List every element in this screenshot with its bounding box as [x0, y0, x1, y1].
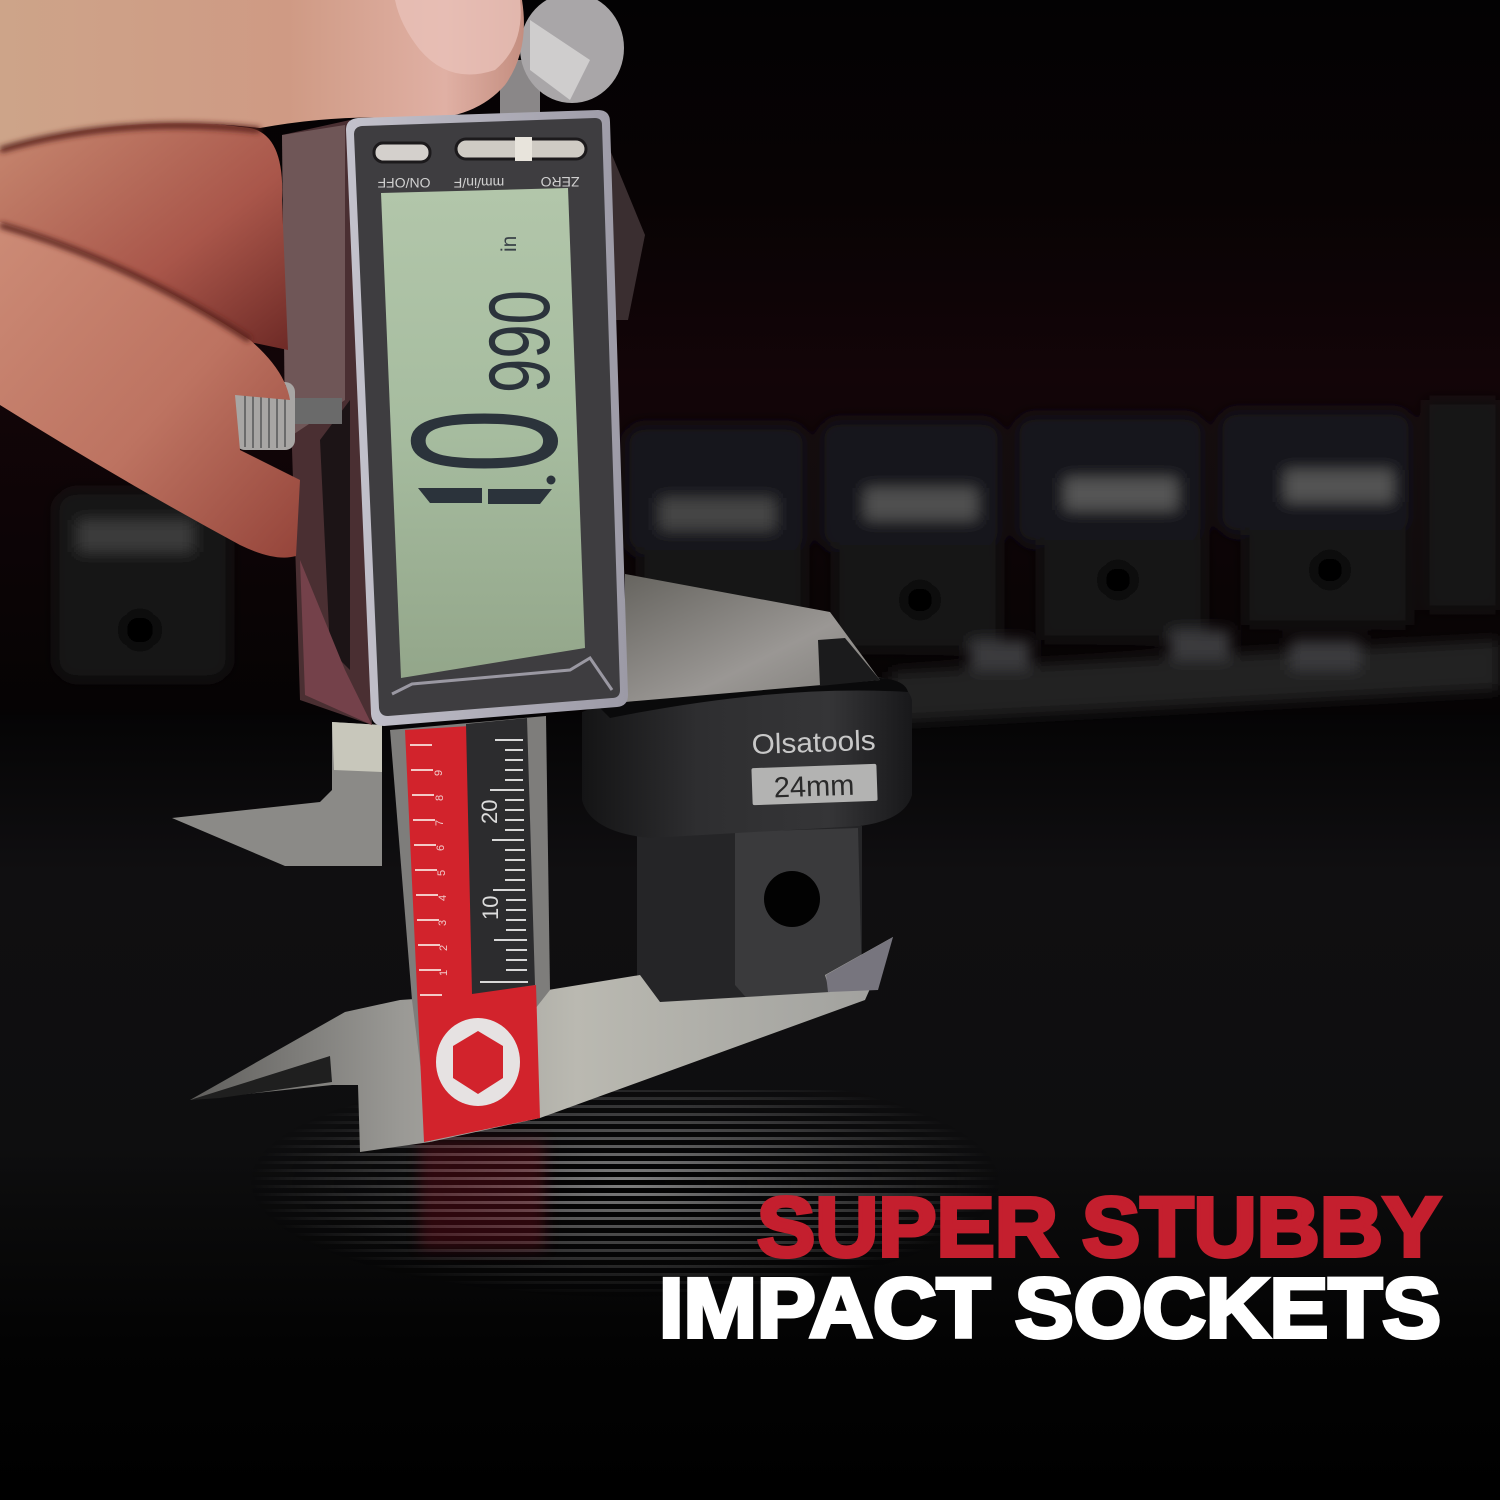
background socket 2	[625, 425, 807, 640]
background	[0, 195, 1500, 1292]
inch scale numbers: 6	[435, 845, 447, 851]
LCD small digits: 990	[472, 290, 568, 393]
headline line 1: SUPER STUBBY	[757, 1180, 1441, 1274]
button labels: ZERO	[540, 174, 579, 190]
LCD lower segments	[418, 488, 552, 504]
LCD large digit: 0	[369, 409, 601, 473]
inch scale numbers: 3	[437, 920, 449, 926]
inch scale numbers: 4	[437, 895, 449, 901]
background socket 6	[1425, 400, 1500, 610]
inch scale numbers: 1	[438, 970, 450, 976]
thumb	[0, 0, 524, 150]
caliper beam: 10	[478, 896, 503, 920]
socket head	[582, 676, 912, 838]
socket: 24mm stubby impact socket	[582, 676, 912, 1002]
inch scale numbers: 2	[438, 945, 450, 951]
LCD screen	[381, 188, 585, 678]
headline	[659, 1180, 1441, 1355]
beam steel edges	[390, 716, 550, 1142]
thumbscrew	[235, 382, 342, 450]
background socket 5	[1218, 410, 1413, 625]
caliper lower jaws	[190, 937, 893, 1152]
inch tick marks	[410, 745, 442, 995]
socket drive end	[637, 826, 862, 1002]
thumbnail	[395, 0, 521, 74]
millimetre scale numbers: 20	[477, 800, 502, 824]
caliper rear body	[282, 120, 645, 725]
hand	[0, 0, 524, 558]
silver disc held in fingers	[500, 0, 624, 120]
on/off button	[374, 143, 430, 162]
size tag	[751, 764, 878, 805]
brand logo text: Olsatools	[751, 725, 876, 760]
caliper beam	[390, 716, 550, 1142]
finger creases	[0, 126, 260, 340]
mm/in and zero rocker button	[456, 137, 586, 161]
hex logo on ruler	[436, 1018, 520, 1106]
millimetre tick marks	[480, 740, 528, 982]
background socket 3	[820, 420, 1002, 650]
button labels: ON/OFF	[378, 175, 430, 191]
digital caliper display unit	[346, 110, 628, 726]
inch scale numbers: 7	[434, 820, 446, 826]
size tag: 24mm	[773, 770, 855, 804]
socket rail	[890, 630, 1500, 722]
index finger	[0, 121, 288, 350]
caliper upper left jaw	[172, 722, 382, 866]
inch scale numbers: 9	[433, 770, 445, 776]
display face	[354, 118, 620, 716]
bottom outline of display face	[392, 658, 612, 694]
inch scale numbers: 8	[434, 795, 446, 801]
middle finger	[0, 222, 300, 558]
background socket 4	[1015, 415, 1205, 640]
caliper upper right jaw	[625, 574, 880, 702]
button labels: mm/in/F	[454, 175, 504, 191]
LCD decimal point	[546, 476, 556, 484]
headline line 2: IMPACT SOCKETS	[659, 1261, 1441, 1355]
background socket 1	[55, 490, 230, 680]
button labels	[378, 174, 579, 191]
inch scale numbers	[433, 770, 450, 976]
LCD unit: in	[498, 236, 521, 252]
red ruler strip	[405, 726, 540, 1142]
display bezel	[346, 110, 628, 726]
blurred socket row in background	[55, 400, 1500, 722]
inch scale numbers: 5	[436, 870, 448, 876]
dark millimetre scale	[466, 718, 535, 994]
